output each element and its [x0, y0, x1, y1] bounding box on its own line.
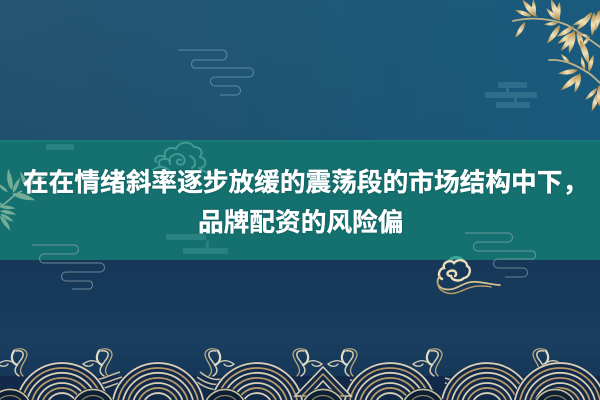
teal band	[0, 140, 600, 260]
decorative line cloud: lower right	[465, 233, 535, 277]
peaked wave	[295, 367, 351, 396]
connecting swell lines	[90, 370, 560, 390]
cloud ornament: band centre	[153, 143, 212, 174]
wave pattern: bottom border	[0, 349, 600, 400]
small foreground domes	[0, 388, 575, 400]
title: 品牌配资的风险偏	[198, 209, 404, 237]
title: 在在情绪斜率逐步放缓的震荡段的市场结构中下，	[23, 169, 588, 197]
dark water behind waves	[0, 376, 600, 400]
spray crests	[0, 349, 562, 376]
large domes	[15, 362, 600, 400]
bamboo leaves: band left	[0, 168, 46, 232]
faint cloud bars: band	[46, 144, 228, 254]
faint cloud bars: upper right	[485, 82, 537, 108]
decorative line cloud: lower left	[32, 245, 105, 289]
gold cloud ornament	[437, 257, 500, 294]
decorative line cloud: upper centre	[178, 50, 253, 95]
title	[23, 168, 588, 237]
bamboo branches: upper right	[513, 0, 600, 112]
